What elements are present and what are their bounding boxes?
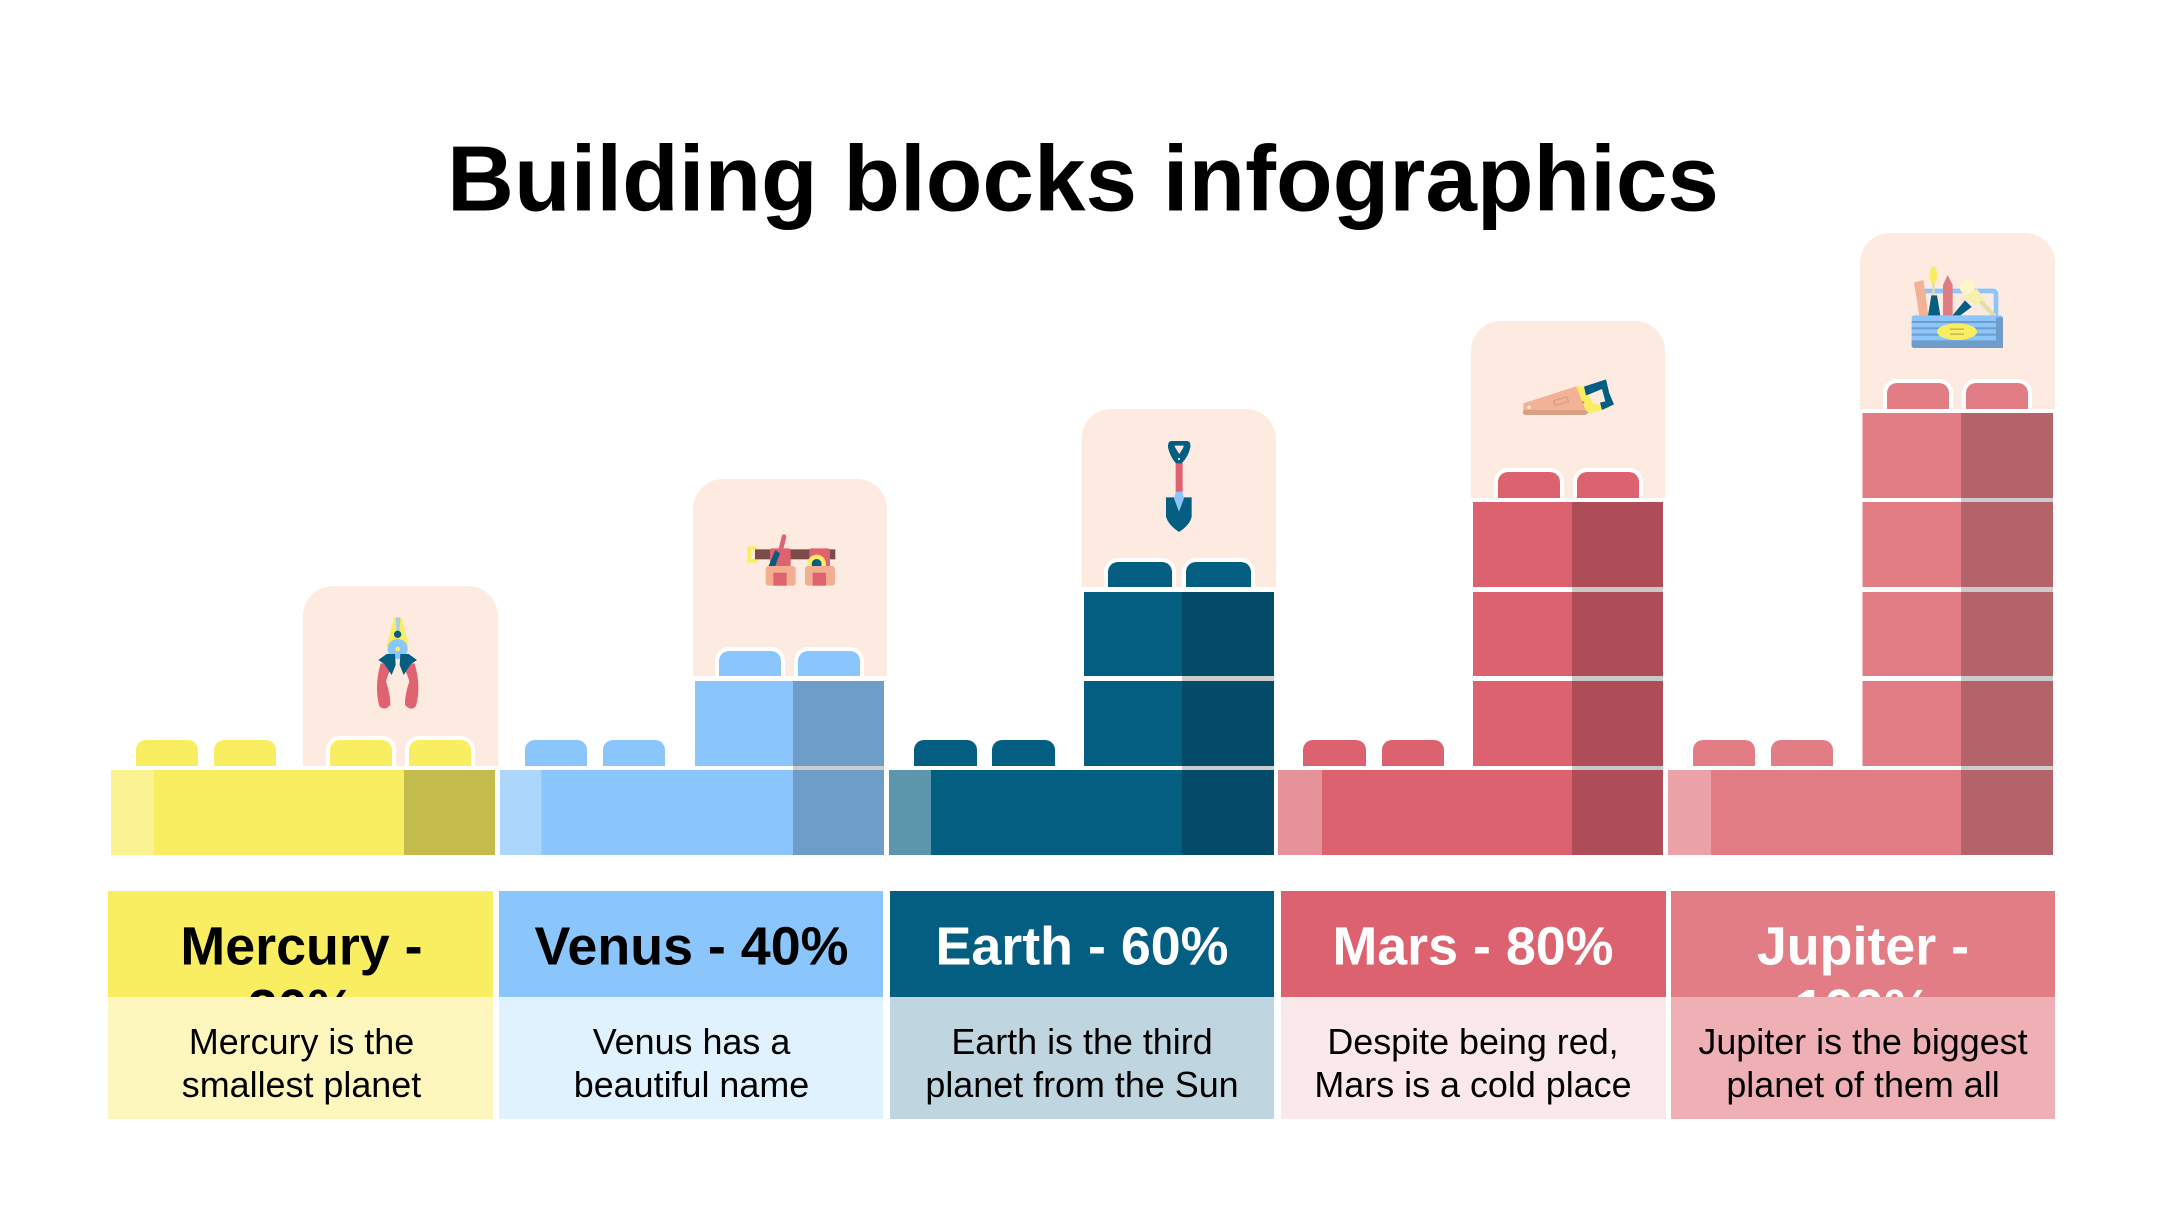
description: Mars bbox=[1281, 997, 1666, 1119]
stacked block: Venus bbox=[695, 681, 884, 766]
heading: Mars bbox=[1281, 891, 1666, 997]
base block: Earth bbox=[889, 770, 1274, 855]
title: Building blocks infographics bbox=[447, 126, 1719, 230]
panel: Jupiter blocks bbox=[1668, 233, 2058, 855]
label: Earth bbox=[890, 891, 1274, 1119]
heading: Jupiter: 100% bbox=[1794, 979, 1932, 1039]
description: Earth: Earth is the third bbox=[951, 1022, 1213, 1062]
icon panel: Mercury bbox=[303, 586, 498, 766]
stacked blocks: Jupiter bbox=[1862, 413, 2053, 766]
base block: Venus bbox=[500, 770, 884, 855]
icon: toolbox bbox=[1912, 267, 2003, 348]
description: Earth: planet from the Sun bbox=[925, 1065, 1239, 1105]
description: Jupiter bbox=[1671, 997, 2055, 1119]
label: Mercury bbox=[108, 891, 493, 1119]
studs: Earth bbox=[914, 562, 1251, 766]
studs: Mars bbox=[1303, 472, 1639, 766]
heading: Venus bbox=[499, 891, 883, 997]
heading: Earth: Earth - 60% bbox=[936, 916, 1228, 976]
description: Venus: Venus has a bbox=[593, 1022, 790, 1062]
label: Jupiter bbox=[1671, 891, 2055, 1119]
description: Mercury bbox=[108, 997, 493, 1119]
icon: shovel bbox=[1166, 441, 1192, 532]
heading: Mercury: 20% bbox=[248, 979, 355, 1039]
description: Mercury: Mercury is the bbox=[189, 1022, 414, 1062]
heading: Mars: Mars - 80% bbox=[1332, 916, 1614, 976]
description: Jupiter: Jupiter is the biggest bbox=[1698, 1022, 2028, 1062]
stacked blocks: Mars bbox=[1473, 502, 1663, 766]
heading: Venus: Venus - 40% bbox=[535, 916, 848, 976]
heading: Mercury bbox=[108, 891, 493, 1039]
description: Venus bbox=[499, 997, 883, 1119]
icon panel: Mars bbox=[1471, 321, 1665, 498]
panel: Mars blocks bbox=[1278, 321, 1668, 855]
heading: Mercury: Mercury - bbox=[180, 916, 423, 976]
icon: tool belt bbox=[749, 537, 835, 586]
heading: Jupiter: Jupiter - bbox=[1757, 916, 1969, 976]
description: Mars: Despite being red, bbox=[1327, 1022, 1619, 1062]
icon panel: Jupiter bbox=[1860, 233, 2055, 409]
description: Venus: beautiful name bbox=[574, 1065, 809, 1105]
description: Earth bbox=[890, 997, 1274, 1119]
base block: Mars bbox=[1278, 770, 1663, 855]
studs: Mercury bbox=[136, 740, 471, 766]
icon: saw bbox=[1523, 379, 1614, 415]
icon: pliers bbox=[377, 617, 418, 709]
heading: Jupiter bbox=[1671, 891, 2055, 1039]
studs: Venus bbox=[525, 651, 860, 766]
icon panel: Venus bbox=[693, 479, 887, 676]
base block: Jupiter bbox=[1668, 770, 2053, 855]
panel: Earth blocks bbox=[889, 409, 1278, 855]
label: Mars bbox=[1281, 891, 1666, 1119]
description: Mars: Mars is a cold place bbox=[1314, 1065, 1632, 1105]
base block: Mercury bbox=[111, 770, 495, 855]
label: Venus bbox=[499, 891, 883, 1119]
icon panel: Earth bbox=[1082, 409, 1276, 587]
panel: Mercury blocks bbox=[111, 586, 500, 855]
heading: Earth bbox=[890, 891, 1274, 997]
studs: Jupiter bbox=[1693, 383, 2028, 766]
panel: Venus blocks bbox=[500, 479, 890, 855]
description: Jupiter: planet of them all bbox=[1726, 1065, 2000, 1105]
description: Mercury: smallest planet bbox=[182, 1065, 421, 1105]
stacked blocks: Earth bbox=[1084, 592, 1274, 766]
